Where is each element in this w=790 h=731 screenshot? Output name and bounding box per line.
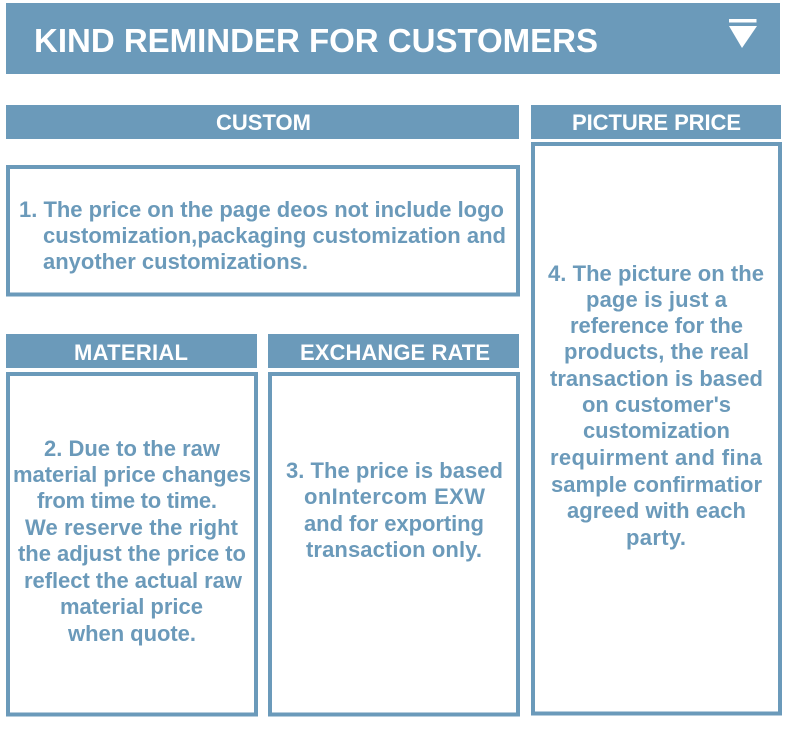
text box: picture price: page is just a — [586, 287, 728, 312]
heading: custom: CUSTOM — [216, 110, 311, 135]
heading: picture price: PICTURE PRICE — [572, 110, 741, 135]
title: KIND REMINDER FOR CUSTOMERS — [34, 22, 598, 59]
text box: material — [8, 374, 256, 714]
panel: material — [6, 334, 257, 714]
text box: material: We reserve the right — [25, 515, 239, 540]
text box: picture price: agreed with each — [567, 498, 746, 523]
text box: picture price: party. — [626, 525, 686, 550]
heading: picture price — [531, 105, 781, 139]
text box: material: material price changes — [13, 462, 251, 487]
text box: exchange rate — [270, 374, 518, 714]
title banner — [6, 3, 780, 74]
text box: material: reflect the actual raw — [24, 568, 243, 593]
text box: picture price — [533, 144, 780, 714]
text box: picture price: 4. The picture on the — [548, 261, 764, 286]
text box: picture price: requirment and fina — [550, 445, 763, 470]
heading: custom — [6, 105, 519, 139]
text box: picture price: sample confirmatior — [551, 472, 762, 497]
panel: custom — [6, 105, 519, 294]
text box: exchange rate: onIntercom EXW — [304, 484, 485, 509]
text box: exchange rate: transaction only. — [306, 537, 482, 562]
text box: material: when quote. — [67, 621, 196, 646]
text box: material: the adjust the price to — [18, 541, 246, 566]
panel: picture price — [531, 105, 781, 714]
text box: material: material price — [60, 594, 203, 619]
text box: material: from time to time. — [37, 488, 217, 513]
text box: picture price: products, the real — [564, 339, 749, 364]
heading: exchange rate: EXCHANGE RATE — [300, 340, 490, 365]
heading: material: MATERIAL — [74, 340, 188, 365]
text box: picture price: reference for the — [570, 313, 743, 338]
heading: exchange rate — [268, 334, 519, 368]
text box: custom: 1. The price on the page deos not include logo — [19, 197, 504, 222]
heading: material — [6, 334, 257, 368]
text box: custom: anyother customizations. — [43, 249, 308, 274]
text box: material: 2. Due to the raw — [44, 436, 221, 461]
text box: picture price: customization — [583, 418, 730, 443]
text box: custom — [8, 167, 518, 294]
text box: exchange rate: and for exporting — [304, 511, 484, 536]
text box: picture price: transaction is based — [550, 366, 763, 391]
text box: custom: customization,packaging customization and — [43, 223, 506, 248]
text box: picture price: on customer's — [582, 392, 731, 417]
panel: exchange rate — [268, 334, 519, 714]
icon: down triangle — [729, 19, 757, 48]
text box: exchange rate: 3. The price is based — [286, 458, 503, 483]
